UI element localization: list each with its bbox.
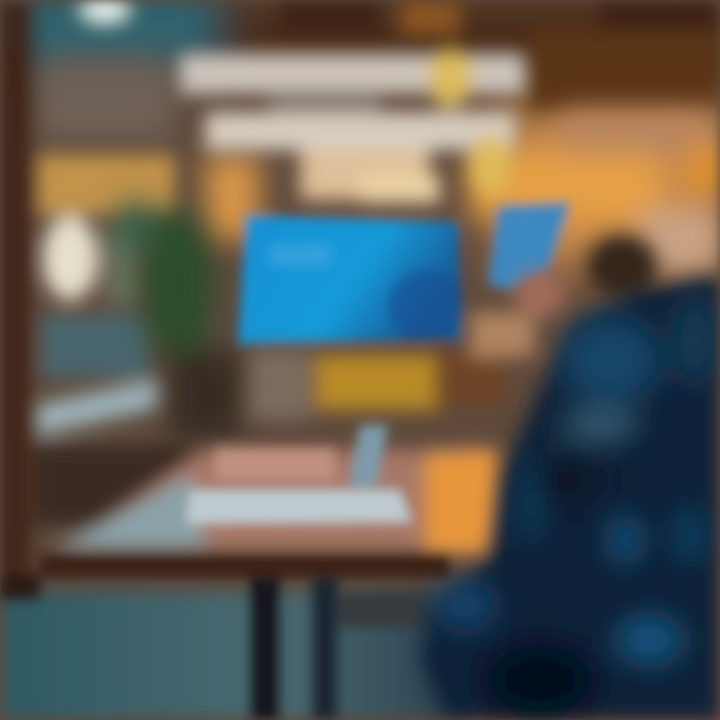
background wall bbox=[0, 0, 720, 270]
floor bbox=[0, 592, 460, 720]
top left window light bbox=[30, 0, 210, 140]
jacket highlights bbox=[435, 295, 717, 716]
hand holding tablet bbox=[514, 271, 566, 319]
warm orange glow behind screen bbox=[205, 110, 720, 270]
white papers on table bbox=[186, 448, 412, 524]
gold reflection below screen bbox=[250, 312, 535, 420]
left wooden pillar bbox=[0, 0, 30, 600]
jacket body bbox=[420, 275, 720, 720]
green plant bbox=[115, 199, 240, 440]
window highlight bbox=[79, 0, 131, 24]
small blue tablet bbox=[488, 202, 570, 290]
ceiling wood beams bbox=[280, 0, 720, 110]
white blurred signage panel bbox=[180, 48, 525, 203]
person head bbox=[586, 234, 658, 298]
person in dark blue jacket bbox=[420, 275, 720, 720]
left window: amber and white light bbox=[30, 155, 200, 525]
table front edge bbox=[0, 554, 450, 600]
table top bbox=[55, 450, 500, 550]
table legs bbox=[250, 578, 430, 720]
screen stand bbox=[348, 425, 388, 488]
orange notebook bbox=[425, 450, 498, 552]
blue screen bbox=[238, 215, 463, 344]
